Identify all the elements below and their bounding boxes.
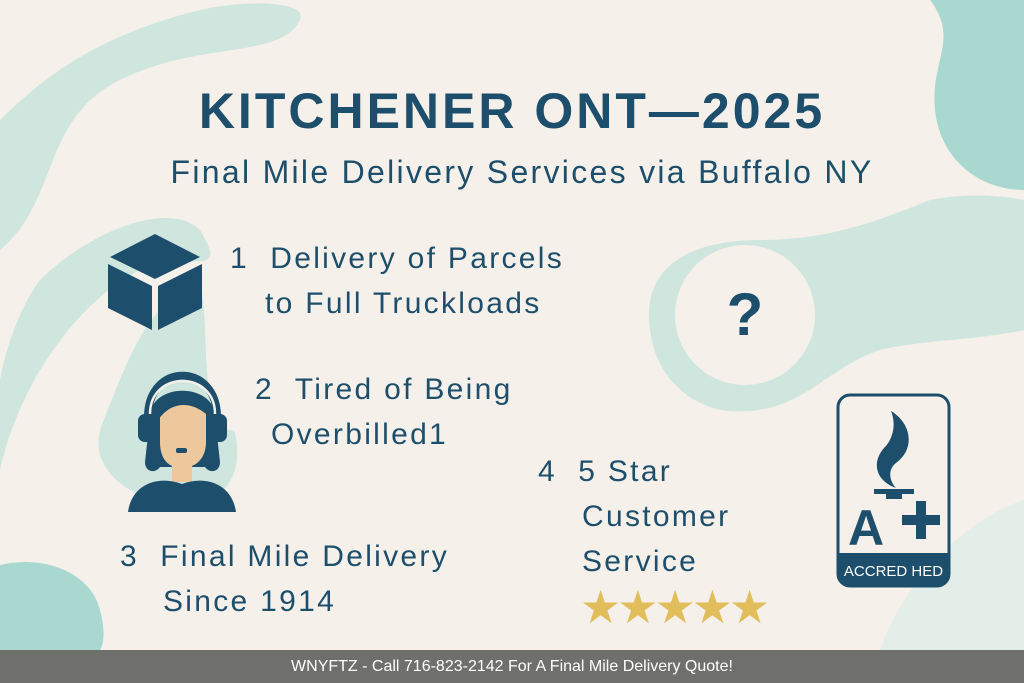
item 4: Customer <box>582 500 730 533</box>
item 1: to Full Truckloads <box>265 287 542 320</box>
item 2 <box>255 373 513 451</box>
stars: ★★★★★ <box>580 581 766 633</box>
question mark circle: ? <box>727 281 763 348</box>
title: KITCHENER ONT—2025 <box>199 83 825 139</box>
badge: A+ accredited: A <box>848 500 884 556</box>
question mark circle <box>675 245 815 385</box>
footer bar: WNYFTZ - Call 716-823-2142 For A Final Mile Delivery Quote! <box>291 658 733 675</box>
item 4 <box>538 455 730 578</box>
icon: box <box>108 234 202 330</box>
footer bar <box>0 650 1024 683</box>
item 4: Service <box>582 545 698 578</box>
item 2: 2 Tired of Being <box>255 373 513 406</box>
item 4: 4 5 Star <box>538 455 672 488</box>
item 3: Since 1914 <box>163 585 336 618</box>
subtitle: Final Mile Delivery Services via Buffalo NY <box>171 154 873 190</box>
item 2: Overbilled1 <box>271 418 448 451</box>
badge: A+ accredited <box>836 394 950 588</box>
item 1 <box>230 242 564 320</box>
icon: headset agent <box>128 372 238 512</box>
badge: A+ accredited: ACCRED HED <box>844 563 943 580</box>
item 1: 1 Delivery of Parcels <box>230 242 564 275</box>
item 3 <box>120 540 449 618</box>
item 3: 3 Final Mile Delivery <box>120 540 449 573</box>
